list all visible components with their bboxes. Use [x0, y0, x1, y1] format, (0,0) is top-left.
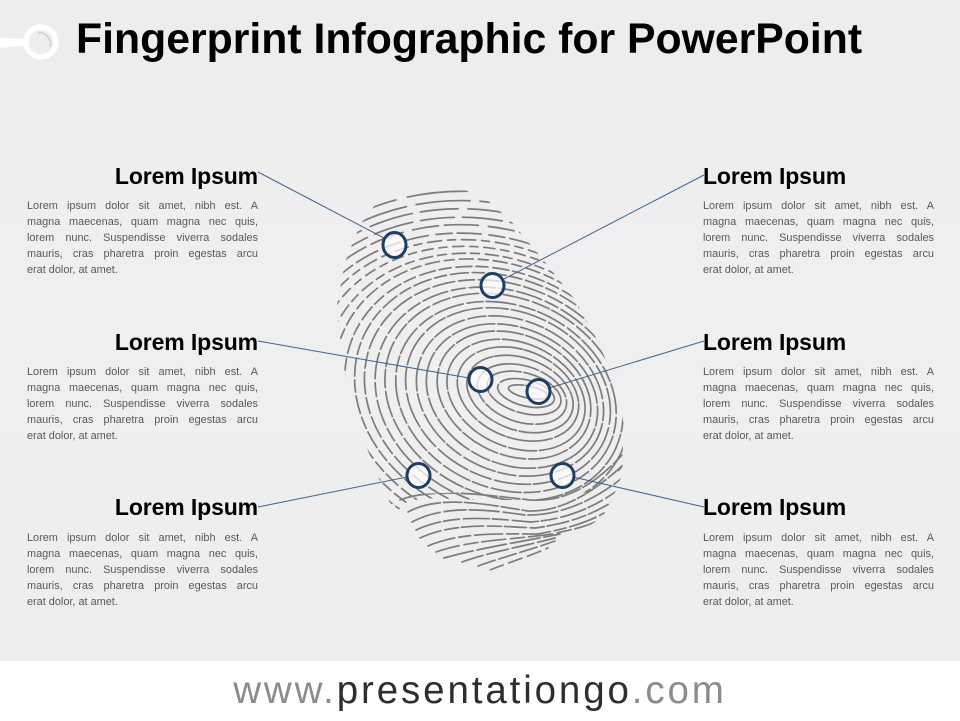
footer website address	[0, 661, 960, 720]
text block: middle right	[703, 329, 934, 442]
text block: top left: erat dolor, at amet.	[27, 264, 118, 276]
text block: top right: lorem nunc. Suspendisse viverra sodales	[703, 232, 934, 244]
callout markers	[383, 232, 574, 488]
text block: top left: lorem nunc. Suspendisse viverra sodales	[27, 232, 258, 244]
fingerprint with callout markers	[258, 172, 704, 570]
text block: bottom left: Lorem Ipsum	[115, 494, 258, 520]
text block: middle right: lorem nunc. Suspendisse viverra sodales	[703, 398, 934, 410]
text block: top right: erat dolor, at amet.	[703, 264, 794, 276]
text block: bottom left: Lorem ipsum dolor sit amet, nibh est. A	[27, 532, 258, 544]
text block: top right: magna maecenas, quam magna nec quis,	[703, 216, 934, 228]
text block: middle left: erat dolor, at amet.	[27, 430, 118, 442]
text block: bottom left: mauris, cras pharetra proin egestas arcu	[27, 580, 258, 592]
text block: top right: mauris, cras pharetra proin egestas arcu	[703, 248, 934, 260]
text block: bottom right	[703, 494, 934, 608]
text block: middle right: mauris, cras pharetra proin egestas arcu	[703, 414, 934, 426]
footer website address: www.presentationgo.com	[233, 669, 727, 712]
text block: middle right: Lorem Ipsum	[703, 329, 846, 355]
text block: bottom right: erat dolor, at amet.	[703, 596, 794, 608]
text block: top left: Lorem Ipsum	[115, 163, 258, 189]
text block: bottom right: Lorem Ipsum	[703, 494, 846, 520]
title: Fingerprint Infographic for PowerPoint	[76, 15, 862, 63]
text block: middle right: Lorem ipsum dolor sit amet, nibh est. A	[703, 366, 934, 378]
text block: bottom left: erat dolor, at amet.	[27, 596, 118, 608]
text block: top left: magna maecenas, quam magna nec quis,	[27, 216, 258, 228]
text block: top left: Lorem ipsum dolor sit amet, nibh est. A	[27, 200, 258, 212]
text block: top right: Lorem Ipsum	[703, 163, 846, 189]
text block: middle left: Lorem ipsum dolor sit amet, nibh est. A	[27, 366, 258, 378]
text block: middle left	[27, 329, 258, 442]
text block: bottom right: mauris, cras pharetra proin egestas arcu	[703, 580, 934, 592]
text block: middle right: erat dolor, at amet.	[703, 430, 794, 442]
callout lines	[258, 172, 704, 507]
text block: middle left: Lorem Ipsum	[115, 329, 258, 355]
text block: bottom right: magna maecenas, quam magna nec quis,	[703, 548, 934, 560]
text block: top left: mauris, cras pharetra proin egestas arcu	[27, 248, 258, 260]
text block: bottom right: lorem nunc. Suspendisse viverra sodales	[703, 564, 934, 576]
text block: middle left: mauris, cras pharetra proin egestas arcu	[27, 414, 258, 426]
text block: top left	[27, 163, 258, 276]
text block: bottom left: magna maecenas, quam magna nec quis,	[27, 548, 258, 560]
fingerprint ridges	[337, 190, 624, 570]
text block: middle left: magna maecenas, quam magna nec quis,	[27, 382, 258, 394]
text block: middle left: lorem nunc. Suspendisse viverra sodales	[27, 398, 258, 410]
text block: bottom left	[27, 494, 258, 608]
icon: title ring logo	[0, 24, 58, 60]
text block: bottom right: Lorem ipsum dolor sit amet, nibh est. A	[703, 532, 934, 544]
text block: bottom left: lorem nunc. Suspendisse viverra sodales	[27, 564, 258, 576]
text block: top right: Lorem ipsum dolor sit amet, nibh est. A	[703, 200, 934, 212]
text block: top right	[703, 163, 934, 276]
text block: middle right: magna maecenas, quam magna nec quis,	[703, 382, 934, 394]
